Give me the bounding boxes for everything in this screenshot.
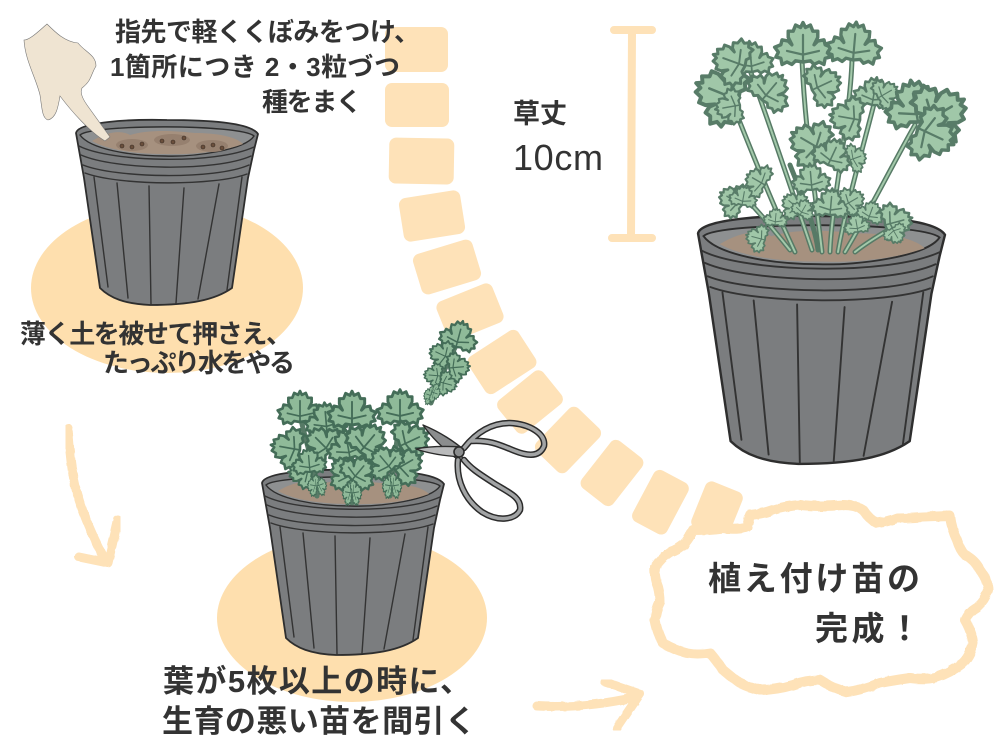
text: step 1 watering (20, 319, 295, 378)
text: plant height (513, 99, 603, 178)
text: plant height: 10cm (513, 137, 603, 178)
seeds in soil (116, 134, 228, 152)
height marker bar (612, 30, 652, 238)
icon: scissors (416, 423, 544, 519)
text: step 1 watering: 薄く土を被せて押さえ、 (20, 319, 292, 349)
text: step 1 sowing instructions: 1箇所につき 2・3粒づつ (110, 52, 400, 82)
arrow: step 2 to step 3 (537, 682, 640, 728)
icon: pointing hand (24, 24, 110, 141)
text: step 2 thinning: 葉が5枚以上の時に、 (163, 664, 471, 699)
pot: step 2 (262, 470, 444, 655)
pot: step 1 (76, 120, 258, 305)
plant: step 2 seedlings (267, 390, 437, 506)
cloud callout outline (655, 505, 988, 692)
text: step 2 thinning: 生育の悪い苗を間引く (162, 704, 476, 739)
growth path of orange tiles (385, 27, 745, 541)
text: cloud message: 植え付け苗の (708, 560, 920, 597)
cut sprig (421, 316, 481, 406)
text: step 1 watering: たっぷり水をやる (103, 348, 295, 378)
text: step 1 sowing instructions: 指先で軽くくぼみをつけ、 (115, 17, 420, 47)
text: step 1 sowing instructions: 種をまく (262, 87, 362, 117)
text: plant height: 草丈 (513, 99, 567, 129)
pot: step 3 large (698, 216, 945, 464)
arrow: step 1 to step 2 (68, 428, 118, 563)
background circle: step 1 (31, 203, 303, 373)
text: cloud message: 完成！ (815, 610, 921, 647)
text: cloud message (708, 560, 921, 647)
text: step 1 sowing instructions (110, 17, 420, 117)
plant: finished seedling (684, 20, 980, 254)
background circle: step 2 (217, 534, 487, 702)
text: step 2 thinning (162, 664, 476, 739)
